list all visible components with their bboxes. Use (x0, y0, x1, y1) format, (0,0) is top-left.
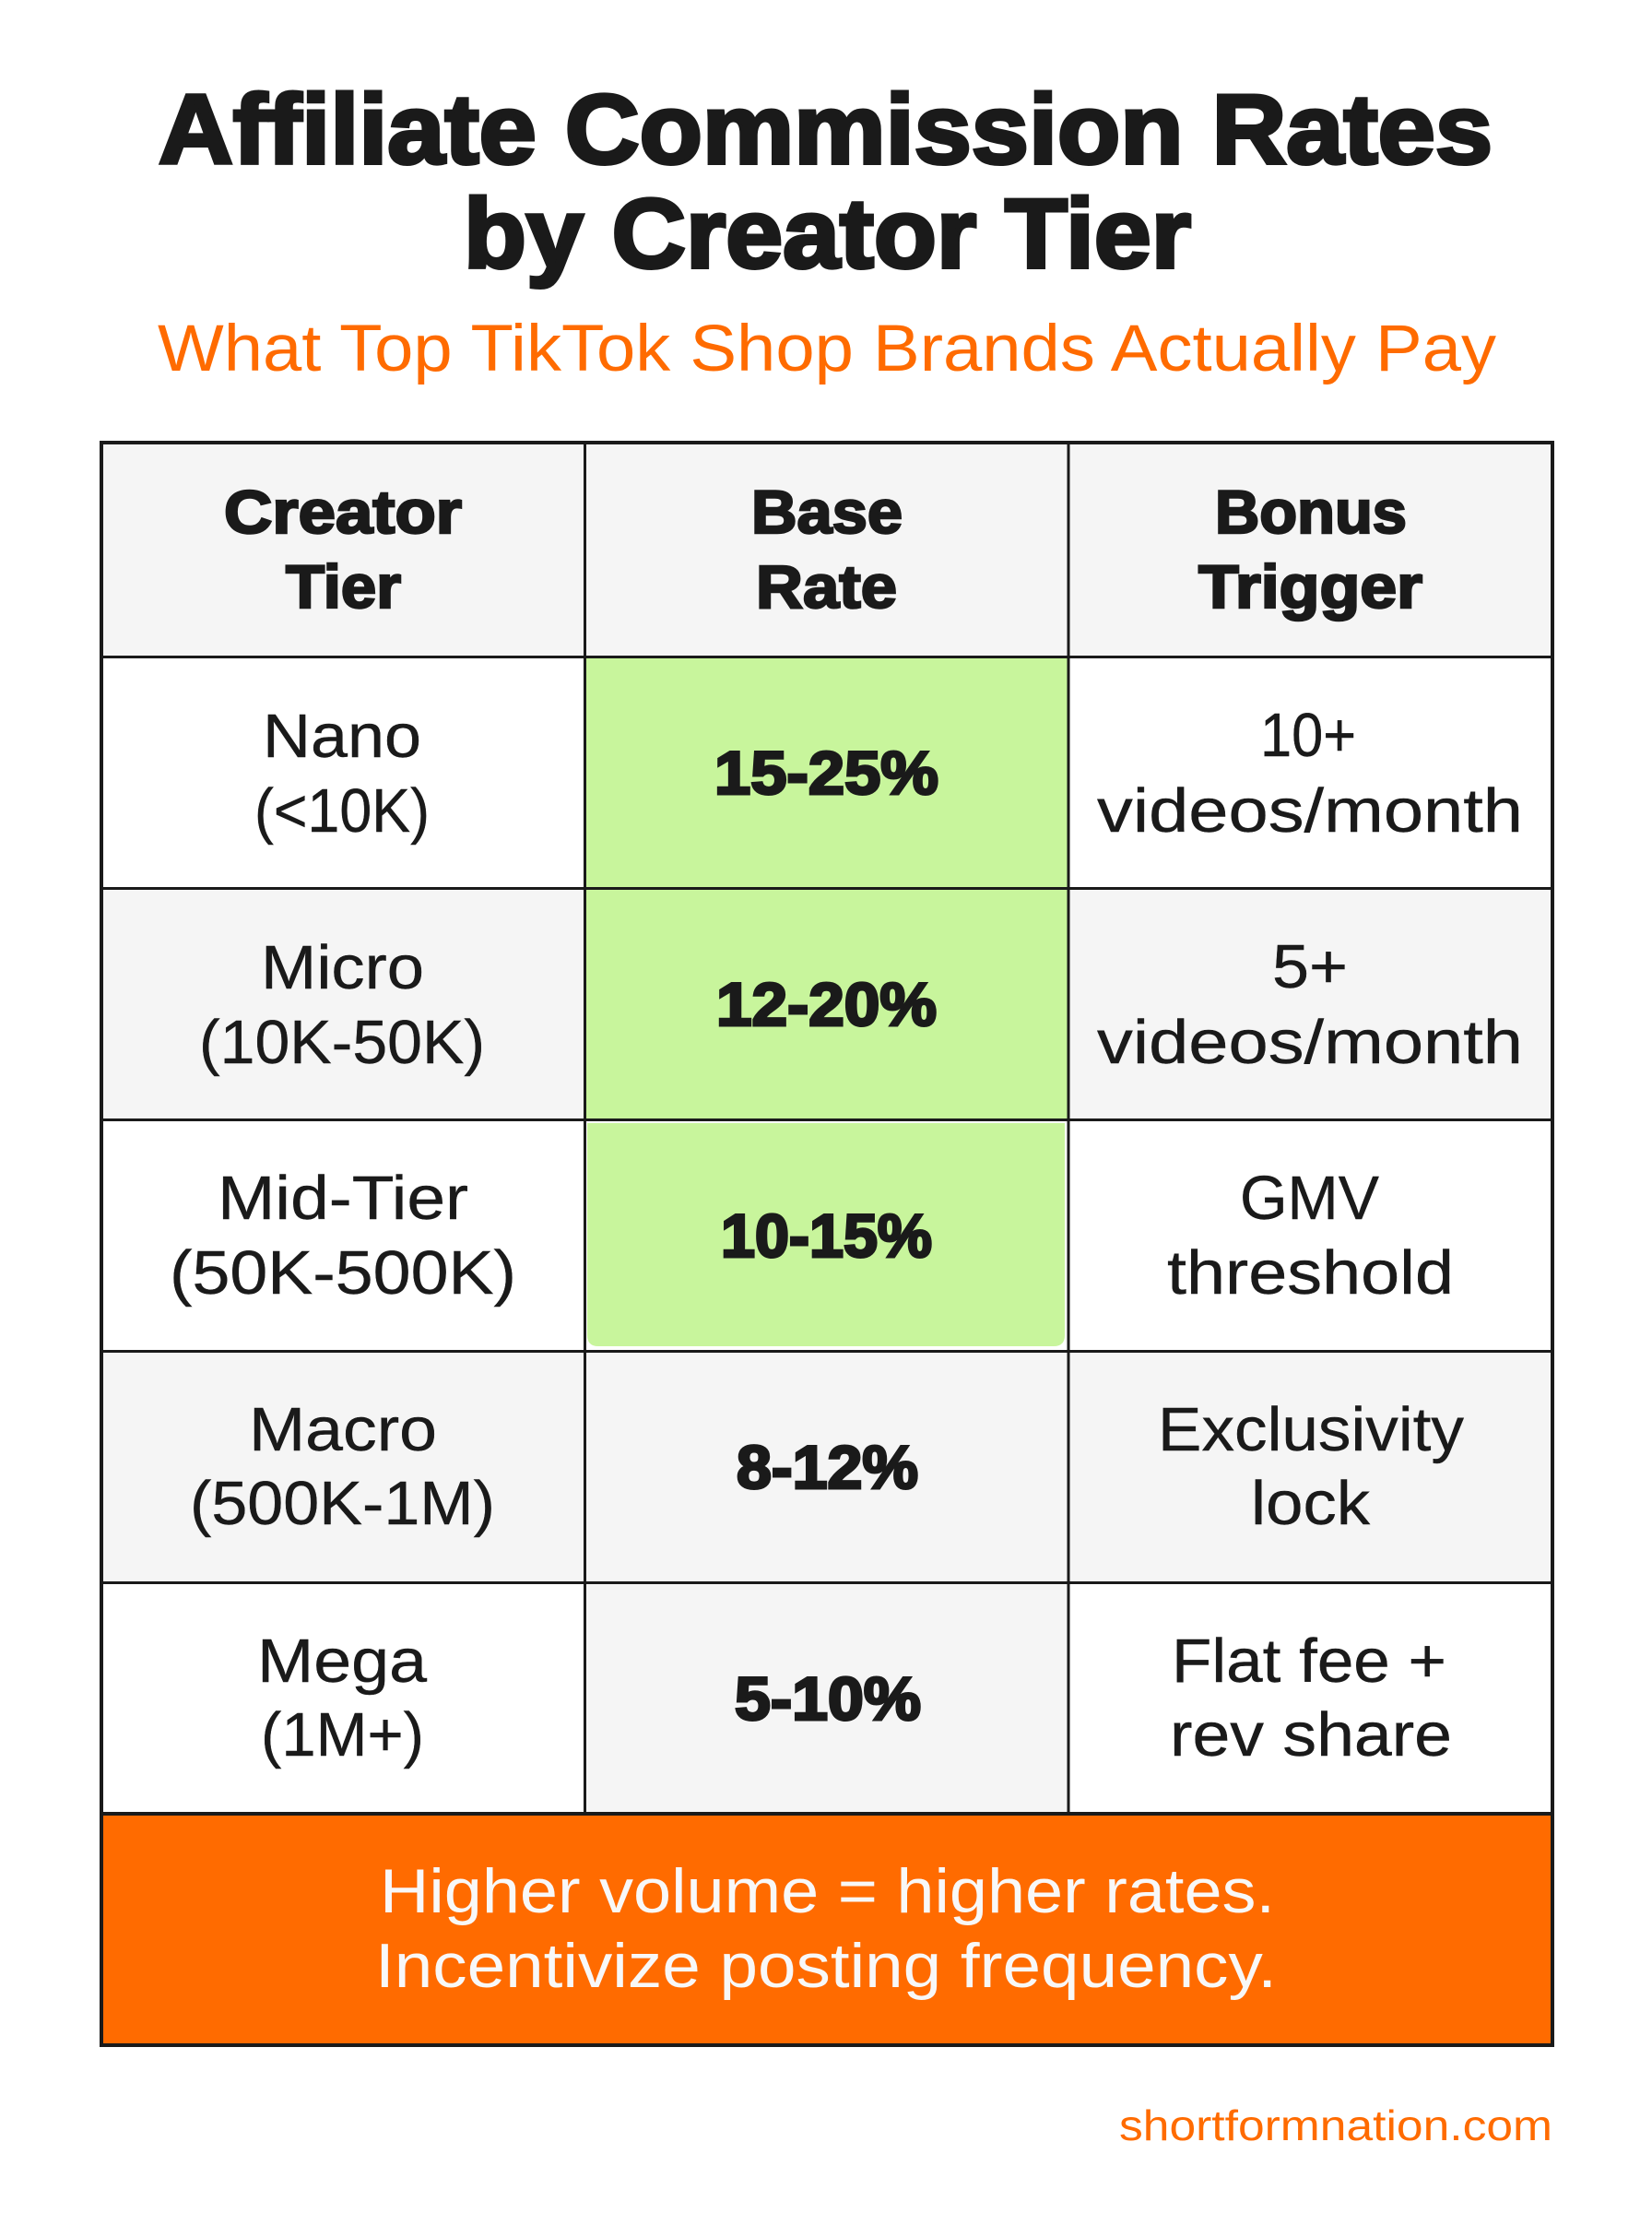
subtitle: What Top TikTok Shop Brands Actually Pay (158, 313, 1497, 385)
row: mid-tier: Mid-Tier (218, 1164, 468, 1233)
mid-tier bonus: GMV (1240, 1164, 1379, 1233)
row: macro tier: (500K-1M) (190, 1469, 495, 1538)
header: creator tier (224, 478, 462, 621)
callout banner: Incentivize posting frequency. (375, 1931, 1277, 2001)
header: bonus trigger (1198, 478, 1422, 621)
macro base rate: 8-12% (737, 1433, 918, 1501)
row: mega tier: (1M+) (261, 1700, 424, 1769)
row: macro tier (190, 1395, 495, 1538)
mid-tier bonus: threshold (1167, 1238, 1454, 1308)
panel: commission table (100, 441, 1554, 2047)
micro bonus: 5+ (1272, 932, 1348, 1001)
row: nano tier (254, 702, 430, 846)
macro bonus: Exclusivity (1158, 1395, 1465, 1464)
row: mega tier (257, 1627, 428, 1769)
micro base rate: 12-20% (716, 970, 937, 1038)
mega bonus: Flat fee + (1172, 1627, 1446, 1696)
title (159, 74, 1493, 289)
title: by Creator Tier (464, 178, 1191, 289)
nano bonus (1097, 701, 1523, 846)
table outer border (100, 441, 1554, 2047)
row: mega tier: Mega (257, 1627, 428, 1696)
row: macro tier: Macro (249, 1395, 437, 1464)
mega base rate: 5-10% (735, 1664, 921, 1733)
table grid lines (100, 441, 1554, 1813)
row: micro tier (199, 933, 485, 1077)
header: creator tier: Creator (224, 478, 462, 546)
macro bonus (1158, 1395, 1465, 1538)
header: bonus trigger: Bonus (1215, 478, 1407, 546)
header: creator tier: Tier (286, 552, 401, 621)
mid-tier bonus (1167, 1164, 1454, 1308)
header: bonus trigger: Trigger (1198, 552, 1422, 621)
row: nano tier: Nano (263, 702, 421, 771)
header: base rate: Base (751, 478, 903, 546)
footer url: shortformnation.com (1119, 2101, 1552, 2149)
mega bonus: rev share (1170, 1700, 1452, 1769)
nano bonus: videos/month (1097, 776, 1523, 846)
callout banner: Higher volume = higher rates. (380, 1856, 1275, 1926)
macro bonus: lock (1251, 1469, 1371, 1538)
micro bonus (1097, 932, 1523, 1077)
header: base rate: Rate (756, 552, 897, 621)
row: micro tier: (10K-50K) (199, 1008, 485, 1077)
mega bonus (1170, 1627, 1452, 1769)
header: base rate (751, 478, 903, 621)
row: nano tier: (<10K) (254, 776, 430, 846)
row: mid-tier (170, 1164, 516, 1308)
mid-tier base rate: 10-15% (721, 1201, 932, 1270)
row: micro tier: Micro (261, 933, 424, 1002)
nano base rate: 15-25% (714, 739, 938, 807)
title: Affiliate Commission Rates (159, 74, 1493, 184)
nano bonus: 10+ (1260, 701, 1356, 770)
highlighted base rate cells (585, 657, 1068, 1346)
row: mid-tier: (50K-500K) (170, 1238, 516, 1308)
table background (100, 441, 1554, 2047)
callout banner (101, 1814, 1552, 2045)
micro bonus: videos/month (1097, 1008, 1523, 1077)
